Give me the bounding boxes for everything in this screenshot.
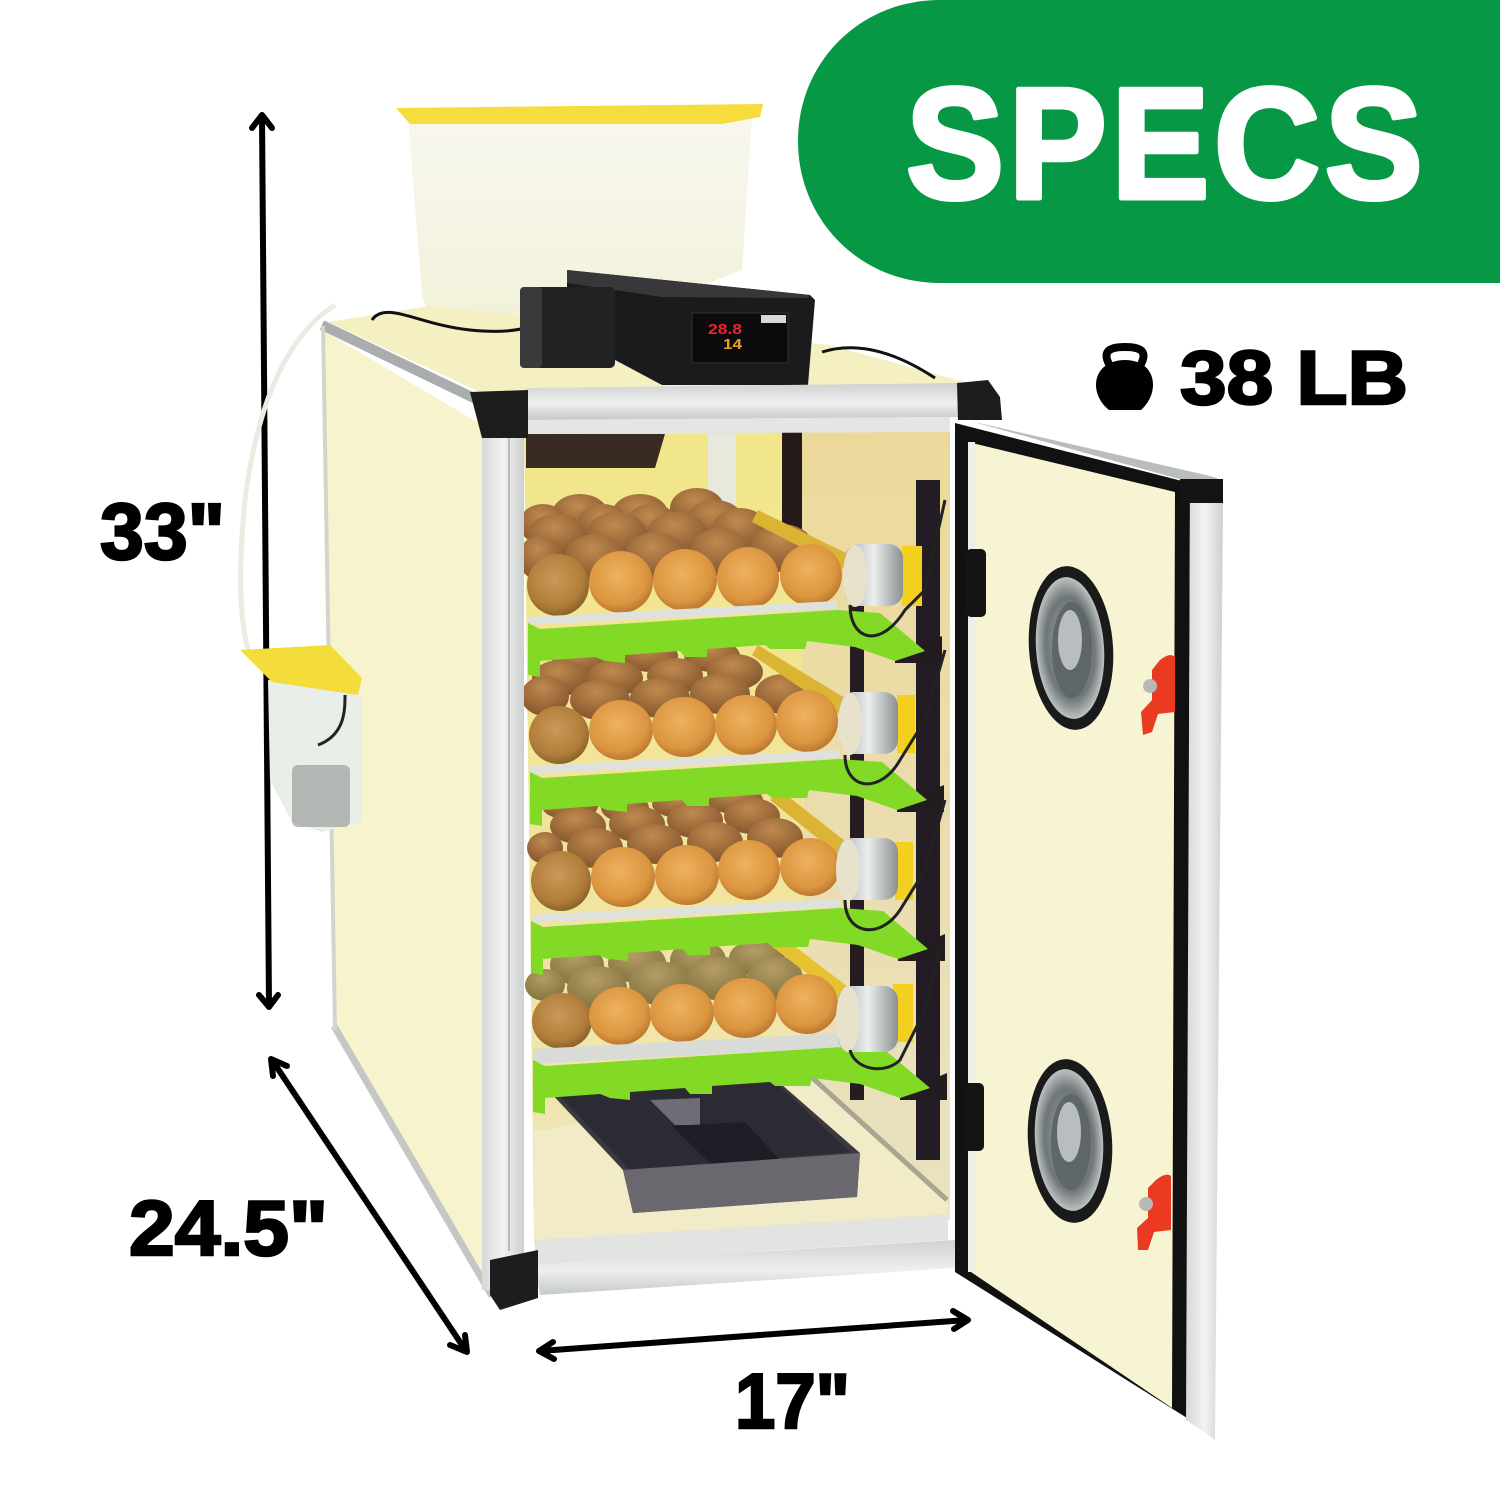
incubator [240, 104, 1223, 1440]
hinge top [966, 549, 986, 617]
label: height 33 inches: 33" [100, 487, 225, 576]
water tank [396, 104, 763, 325]
carrier rail [752, 510, 850, 570]
controller: 14 [723, 336, 743, 353]
door window top [1023, 563, 1119, 733]
back eggs [518, 488, 814, 582]
motors [836, 500, 945, 1069]
door [955, 421, 1223, 1440]
red latch bottom [1137, 1175, 1171, 1250]
rail 2 [530, 750, 944, 826]
label: depth 24.5 inches: 24.5" [129, 1184, 328, 1272]
tray 4 [525, 935, 852, 1049]
water tube [241, 305, 335, 650]
arrow: width [539, 1311, 968, 1359]
arrow: height [252, 115, 278, 1007]
power cable [372, 312, 935, 378]
motor 1 [843, 500, 945, 636]
shelf rails [528, 601, 947, 1114]
floor [534, 1075, 947, 1240]
tray 2 [521, 640, 848, 764]
rail 1 [528, 601, 942, 677]
tray 3 [527, 786, 850, 911]
arrow: depth [271, 1059, 467, 1352]
icon: kettlebell [1096, 347, 1153, 410]
display readings: 28.8 [708, 321, 742, 338]
interior [524, 428, 950, 1244]
weight label: 38 LB [1180, 336, 1408, 421]
motor 4 [836, 950, 940, 1069]
red latch top [1141, 655, 1175, 735]
right wall [800, 428, 950, 1200]
controller [520, 270, 815, 385]
tray 1 [518, 488, 850, 616]
rear post [708, 434, 736, 524]
side edges [322, 325, 478, 400]
cabinet top [328, 306, 975, 395]
cabinet side panel [322, 330, 495, 1300]
label: width 17 inches: 17" [735, 1357, 850, 1445]
banner: specs [798, 0, 1500, 283]
motor 2 [838, 650, 945, 784]
front frame [470, 380, 1002, 1310]
door window bottom [1022, 1056, 1118, 1226]
hinge bottom [964, 1083, 984, 1151]
heater block [526, 434, 665, 468]
motor 3 [836, 800, 945, 930]
water tray [548, 1077, 860, 1213]
weight spec [1096, 336, 1408, 421]
rail 4 [533, 1033, 947, 1114]
side reservoir [240, 645, 362, 832]
rail 3 [531, 899, 945, 975]
heading: SPECS: SPECS [906, 56, 1427, 232]
rack posts [782, 432, 802, 562]
